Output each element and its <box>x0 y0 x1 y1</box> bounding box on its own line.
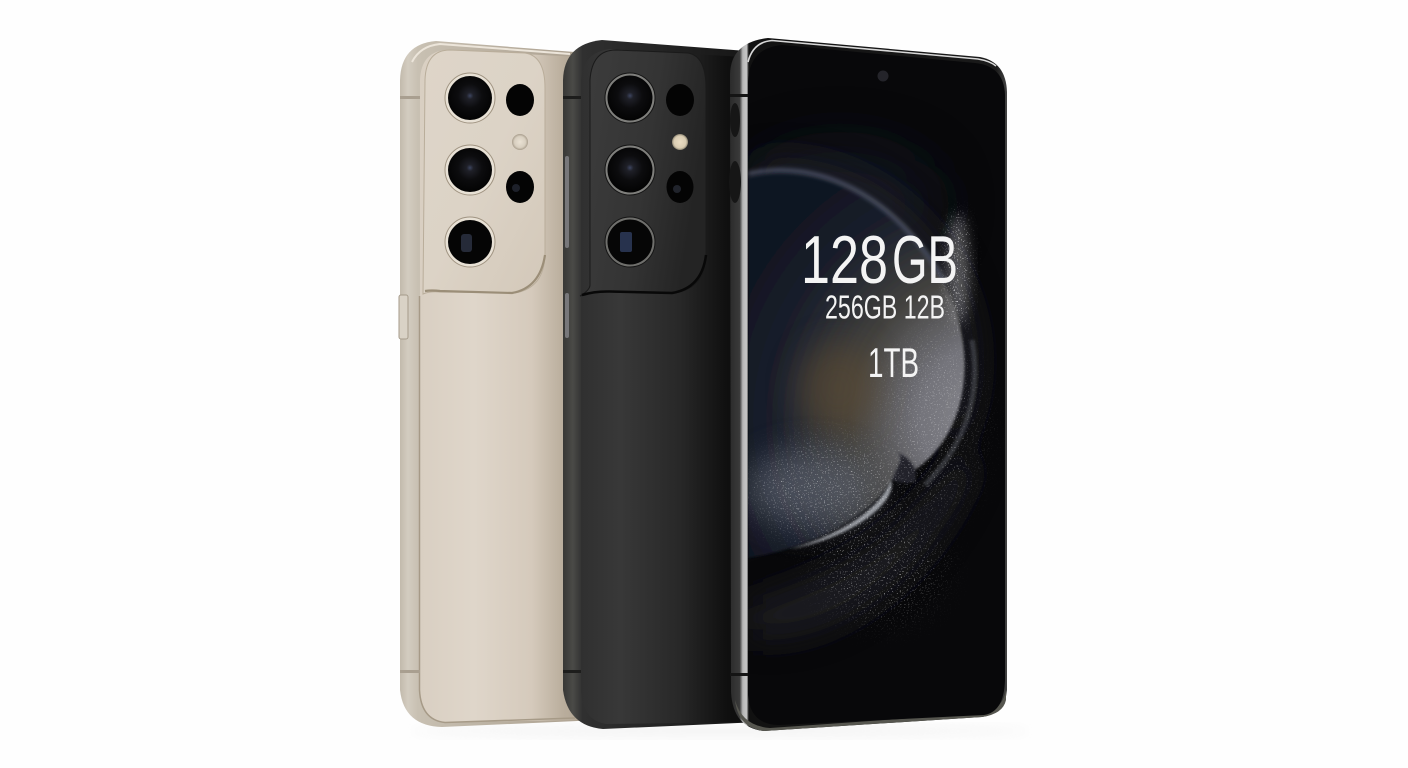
front camera <box>878 70 888 82</box>
black flash <box>672 134 688 150</box>
label: 1TB: 1TB <box>868 339 919 386</box>
front top highlight <box>748 40 996 66</box>
front antenna lines <box>730 94 748 676</box>
black small lens lower <box>666 171 694 203</box>
black back panel <box>581 49 760 724</box>
beige antenna lines <box>400 96 420 673</box>
beige panel highlight <box>420 296 575 722</box>
product illustration: three phones <box>398 38 1007 731</box>
dark notch <box>892 452 916 483</box>
beige back panel <box>420 50 600 722</box>
lit crescent <box>790 480 892 549</box>
outer blue glow <box>800 142 934 217</box>
outer ring halo <box>748 157 979 641</box>
black lens 2 <box>605 145 655 195</box>
outer crescent line <box>925 340 975 485</box>
beige camera island <box>423 50 545 294</box>
beige lens 3 <box>445 217 495 267</box>
beige frame <box>400 41 600 727</box>
ground shadow <box>410 726 1030 736</box>
screen base <box>745 40 1010 730</box>
sand particles <box>748 202 999 640</box>
planet <box>748 173 965 558</box>
black frame <box>563 40 760 729</box>
phone: front with screen <box>729 38 1010 731</box>
beige lens 1 <box>445 73 495 123</box>
black island bottom shadow <box>582 255 706 295</box>
planet rim light <box>748 170 945 282</box>
screen <box>745 40 1010 730</box>
phone: beige back <box>399 41 600 727</box>
beige lens 2 <box>445 145 495 195</box>
beige island bottom shadow <box>425 255 545 293</box>
label: 128GB: GB <box>892 222 958 298</box>
side bumps <box>729 103 741 203</box>
black lens 3 <box>605 217 655 267</box>
lower grey wash <box>746 450 878 526</box>
black antenna lines <box>563 96 581 673</box>
warm glow <box>798 343 878 433</box>
phone: black back <box>563 40 760 729</box>
front bottom edge <box>735 690 1006 731</box>
black small sensor top <box>666 84 694 116</box>
black lens 1 <box>605 73 655 123</box>
black camera island <box>580 50 706 296</box>
storage text <box>801 222 958 386</box>
beige small lens lower <box>506 171 534 203</box>
label: 128GB: 128 <box>801 222 888 298</box>
beige side button <box>399 295 408 339</box>
front frame <box>730 38 1007 731</box>
dust plume <box>947 215 969 325</box>
black side buttons <box>565 156 569 338</box>
beige top highlight <box>412 44 570 62</box>
beige small sensor top <box>506 84 534 116</box>
label: 256GB 12B: 256GB 12B <box>825 288 945 326</box>
beige flash <box>512 134 528 150</box>
